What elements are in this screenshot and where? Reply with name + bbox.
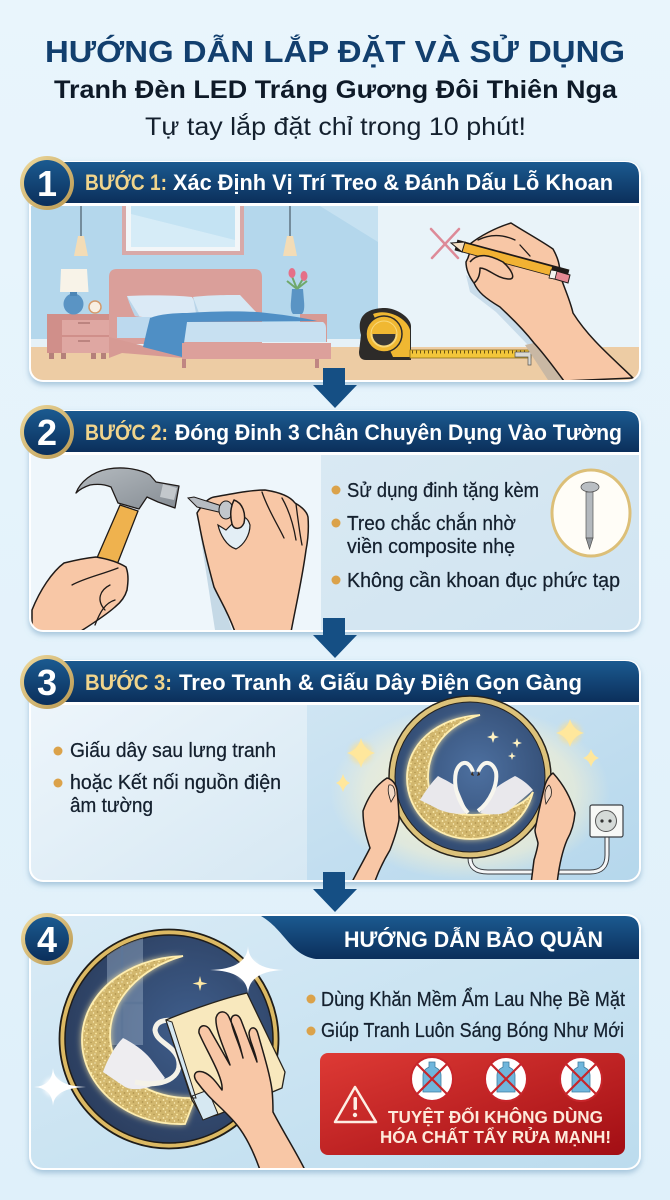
step 3 heading: BƯỚC 3: <box>85 670 172 695</box>
main title: HƯỚNG DẪN LẮP ĐẶT VÀ SỬ DỤNG <box>45 33 625 69</box>
warning text <box>380 1106 611 1147</box>
panel: step 3 <box>20 655 641 884</box>
cleaning cloth <box>166 993 285 1118</box>
left hand holding mirror <box>351 778 399 884</box>
wiping hand <box>195 1012 305 1170</box>
step 2 heading: Đóng Đinh 3 Chân Chuyên Dụng Vào Tường <box>175 420 622 445</box>
step 2 bullet list <box>332 480 620 592</box>
panel: step 2 <box>20 405 641 632</box>
flower vase <box>287 268 308 314</box>
illustration: hanging the lit mirror <box>31 696 639 884</box>
care panel body <box>31 916 639 1170</box>
icon: no chemical bottle 3 <box>560 1057 602 1101</box>
nightstand and lamp <box>47 269 109 359</box>
step 2 heading: BƯỚC 2: <box>85 420 168 445</box>
LED swan mirror <box>389 696 551 858</box>
care bullet list: Giúp Tranh Luôn Sáng Bóng Như Mới <box>321 1020 624 1042</box>
header bar <box>60 661 639 702</box>
power wire and socket <box>470 805 623 872</box>
bed <box>109 269 331 368</box>
sparkles <box>336 719 599 792</box>
care heading: HƯỚNG DẪN BẢO QUẢN <box>344 926 603 952</box>
mark on wall <box>431 229 459 258</box>
right hand holding mirror <box>531 773 575 884</box>
arrow: step 1 to 2 <box>313 368 357 408</box>
pendant lamps <box>74 206 297 256</box>
swan pair <box>420 763 533 814</box>
hammer <box>75 467 180 562</box>
title block <box>45 33 625 141</box>
tagline: Tự tay lắp đặt chỉ trong 10 phút! <box>145 112 526 141</box>
arrow: step 2 to 3 <box>313 618 357 658</box>
step 1 heading: Xác Định Vị Trí Treo & Đánh Dấu Lỗ Khoan <box>173 170 613 195</box>
header bar <box>60 162 639 203</box>
right hand with nail <box>188 490 308 632</box>
badge 3 <box>20 655 74 709</box>
nail medallion <box>552 470 630 556</box>
step 2 bullet list: Sử dụng đinh tặng kèm <box>347 480 539 502</box>
shine sparkles <box>34 946 284 1106</box>
icon: no chemical bottle 1 <box>411 1057 453 1101</box>
step 3 heading: Treo Tranh & Giấu Dây Điện Gọn Gàng <box>179 670 582 695</box>
illustration: wiping the mirror <box>34 930 625 1170</box>
badge 1: 1 <box>37 163 57 204</box>
badge 1 <box>20 156 74 210</box>
step 3 bullet list: hoặc Kết nối nguồn điện <box>70 772 281 794</box>
badge 4: 4 <box>37 919 57 960</box>
right nightstand behind bed <box>300 314 327 342</box>
badge 2 <box>20 405 74 459</box>
illustration: hammer and nail <box>31 455 639 632</box>
step 2 bullet list: viền composite nhẹ <box>347 536 515 558</box>
header bar <box>261 916 639 959</box>
step 1 heading: BƯỚC 1: <box>85 170 167 195</box>
illustration: bedroom and marking the wall <box>31 206 639 382</box>
badge 2: 2 <box>37 412 57 453</box>
panel: care guide <box>21 913 641 1170</box>
badge 4 <box>21 913 73 965</box>
badge 3: 3 <box>37 662 57 703</box>
care bullet list: Dùng Khăn Mềm Ẩm Lau Nhẹ Bề Mặt <box>321 988 625 1011</box>
header bar <box>60 411 639 452</box>
left hand gripping hammer <box>32 557 128 632</box>
hand holding pencil <box>451 223 633 381</box>
step 3 bullet list: âm tường <box>70 795 153 817</box>
arrow: step 3 to care <box>313 872 357 912</box>
picture frame <box>122 206 244 255</box>
warning box <box>320 1053 625 1155</box>
warning text: TUYỆT ĐỐI KHÔNG DÙNG <box>388 1106 603 1127</box>
care bullet list <box>306 988 625 1042</box>
step 2 bullet list: Treo chắc chắn nhờ <box>347 512 516 535</box>
subtitle: Tranh Đèn LED Tráng Gương Đôi Thiên Nga <box>54 76 618 104</box>
panel: step 1 <box>20 156 641 382</box>
step 3 bullet list <box>54 740 281 817</box>
step 2 bullet list: Không cần khoan đục phức tạp <box>347 570 620 592</box>
icon: no chemical bottle 2 <box>485 1057 527 1101</box>
tape measure <box>359 308 531 365</box>
warning text: HÓA CHẤT TẨY RỬA MẠNH! <box>380 1126 611 1147</box>
step 3 bullet list: Giấu dây sau lưng tranh <box>70 740 276 762</box>
icon: warning triangle <box>335 1087 376 1122</box>
